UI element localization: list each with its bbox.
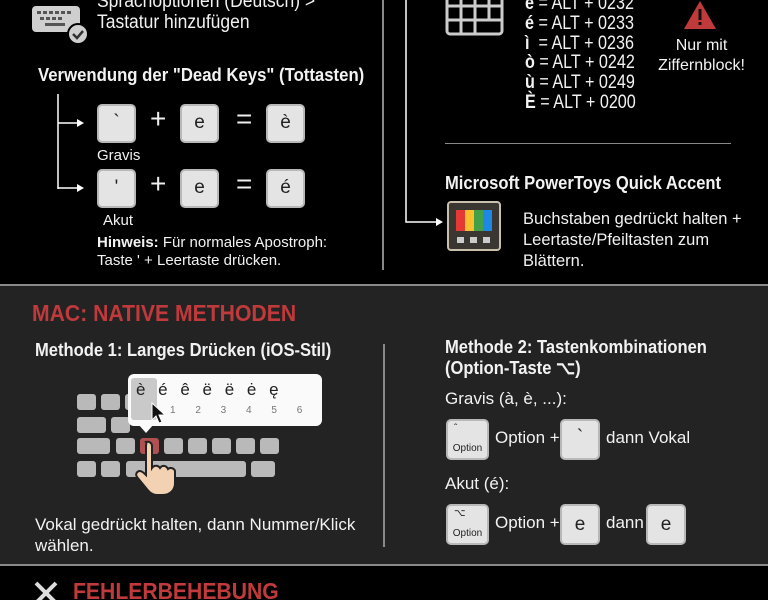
list: alt codes: é = ALT + 0233 (525, 13, 634, 34)
text: powertoys desc: Blättern. (523, 251, 584, 270)
row: option akut: ⌥ (454, 508, 466, 519)
row: akut: ' (115, 177, 118, 198)
arrow: right tree (405, 0, 443, 226)
text: method 1 desc: wählen. (35, 536, 94, 555)
icon: numpad (446, 0, 504, 36)
heading: method 2: (Option-Taste ⌥) (445, 358, 581, 378)
text: powertoys desc (523, 209, 742, 270)
row: gravis: + (150, 103, 166, 134)
row: akut: + (150, 168, 166, 199)
illustration: keyboard long press: è é ê ë ë ė ę (136, 380, 279, 399)
list: alt codes: È = ALT + 0200 (525, 92, 636, 113)
row: option akut: Option + (495, 513, 560, 532)
icon: keyboard with check (32, 6, 87, 43)
heading: powertoys: Microsoft PowerToys Quick Accent (445, 173, 721, 193)
icon: powertoys (447, 201, 501, 251)
list: alt codes (524, 0, 636, 113)
text: hint: Taste ' + Leertaste drücken. (97, 252, 281, 269)
row: option akut: dann (606, 513, 644, 532)
row: akut: é (280, 177, 291, 198)
icon: warning (684, 1, 716, 29)
panel: windows top section (0, 0, 768, 285)
row: option gravis: Option + (495, 428, 560, 447)
text: powertoys desc: Leertaste/Pfeiltasten zum (523, 230, 709, 249)
text: hint: Hinweis: Für normales Apostroph: (97, 234, 327, 251)
title: mac: MAC: NATIVE METHODEN (32, 300, 296, 326)
row: option akut: e (661, 514, 671, 535)
text: akut label: Akut (é): (445, 474, 509, 493)
row: option gravis: ` (577, 427, 583, 448)
panel: mac native (0, 284, 768, 566)
row: gravis: ` (113, 112, 120, 133)
text: numpad only: Nur mit (676, 37, 727, 54)
row: akut (97, 168, 305, 229)
row: gravis: = (236, 103, 252, 134)
row: option gravis: dann Vokal (606, 428, 690, 447)
row: option akut: e (575, 514, 585, 535)
text: hint (97, 234, 327, 269)
row: akut: = (236, 168, 252, 199)
arrow tree (57, 94, 84, 192)
icon: wrench (34, 582, 58, 600)
heading: method 2: Methode 2: Tastenkombinationen (445, 337, 707, 357)
row: akut: e (194, 177, 205, 198)
text: method 1 desc (35, 515, 356, 555)
text: language options: Tastatur hinzufügen (97, 12, 250, 33)
row: gravis: è (280, 112, 291, 133)
heading: dead keys: Verwendung der "Dead Keys" (Tottasten) (38, 65, 364, 85)
heading: method 1: Methode 1: Langes Drücken (iOS-Stil) (35, 340, 331, 360)
row: gravis: Gravis (97, 147, 140, 164)
divider vertical (382, 0, 384, 270)
row: gravis (97, 103, 305, 164)
illustration: keyboard long press (77, 374, 322, 494)
text: method 1 desc: Vokal gedrückt halten, dann Nummer/Klick (35, 515, 355, 534)
row: option gravis: ˆ (454, 423, 457, 434)
text: gravis label: Gravis (à, è, ...): (445, 389, 567, 408)
row: option akut (446, 504, 686, 545)
row: option akut: Option (453, 528, 482, 539)
list: alt codes: ì = ALT + 0236 (525, 33, 634, 54)
row: akut: Akut (103, 212, 133, 229)
row: option gravis (446, 419, 690, 460)
row: gravis: e (194, 112, 205, 133)
text: numpad only (658, 37, 745, 74)
text: language options (97, 0, 315, 33)
list: alt codes: ù = ALT + 0249 (525, 72, 635, 93)
illustration: keyboard long press: 1 2 3 4 5 6 (170, 405, 302, 416)
row: option gravis: Option (453, 443, 482, 454)
text: powertoys desc: Buchstaben gedrückt halten + (523, 209, 742, 228)
list: alt codes: ò = ALT + 0242 (525, 52, 635, 73)
heading: method 2 (445, 337, 707, 378)
text: numpad only: Ziffernblock! (658, 57, 745, 74)
